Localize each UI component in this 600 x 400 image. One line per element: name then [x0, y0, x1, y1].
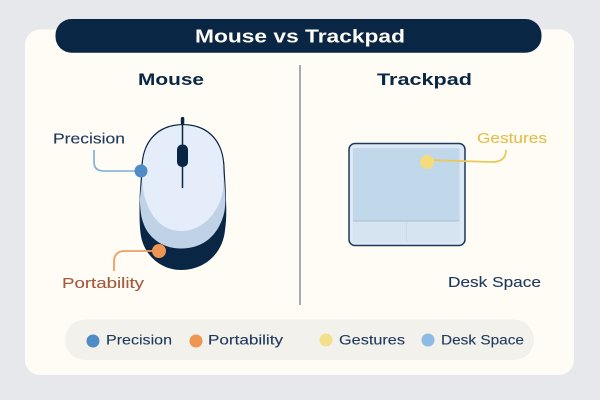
title banner: Mouse vs Trackpad [195, 26, 405, 47]
callout: Precision on mouse [53, 132, 148, 178]
mouse lower shell [140, 125, 225, 248]
heading: Trackpad: Trackpad [377, 70, 472, 89]
legend item: Portability [190, 332, 283, 348]
panel: mouse illustration [140, 117, 226, 270]
label: Desk Space: Desk Space [448, 275, 541, 291]
icon: mouse body [140, 124, 226, 270]
trackpad surface [353, 148, 460, 221]
legend item: Desk Space: Desk Space [441, 332, 524, 348]
trackpad right button [406, 222, 460, 242]
mouse top surface [142, 125, 223, 231]
legend item: Gestures [320, 332, 405, 348]
trackpad frame [349, 144, 465, 246]
callout: Gestures on trackpad: Gestures [477, 131, 547, 147]
callout: Precision on mouse: Precision [53, 132, 125, 148]
trackpad left button [353, 222, 406, 242]
legend item: Portability: Portability [208, 332, 283, 348]
legend item: Precision: Precision [106, 332, 172, 348]
heading: Mouse: Mouse [138, 70, 204, 89]
callout: Portability on mouse [62, 244, 166, 292]
legend item: Precision [86, 332, 172, 348]
legend item: Gestures: Gestures [339, 332, 405, 348]
title banner [56, 19, 542, 53]
mouse cord line [182, 117, 184, 188]
legend [65, 320, 534, 360]
icon: scroll wheel [177, 144, 188, 167]
panel: main card [25, 30, 574, 375]
panel: trackpad illustration [349, 144, 465, 246]
callout: Portability on mouse: Portability [62, 276, 145, 292]
callout: Gestures on trackpad [420, 131, 547, 169]
